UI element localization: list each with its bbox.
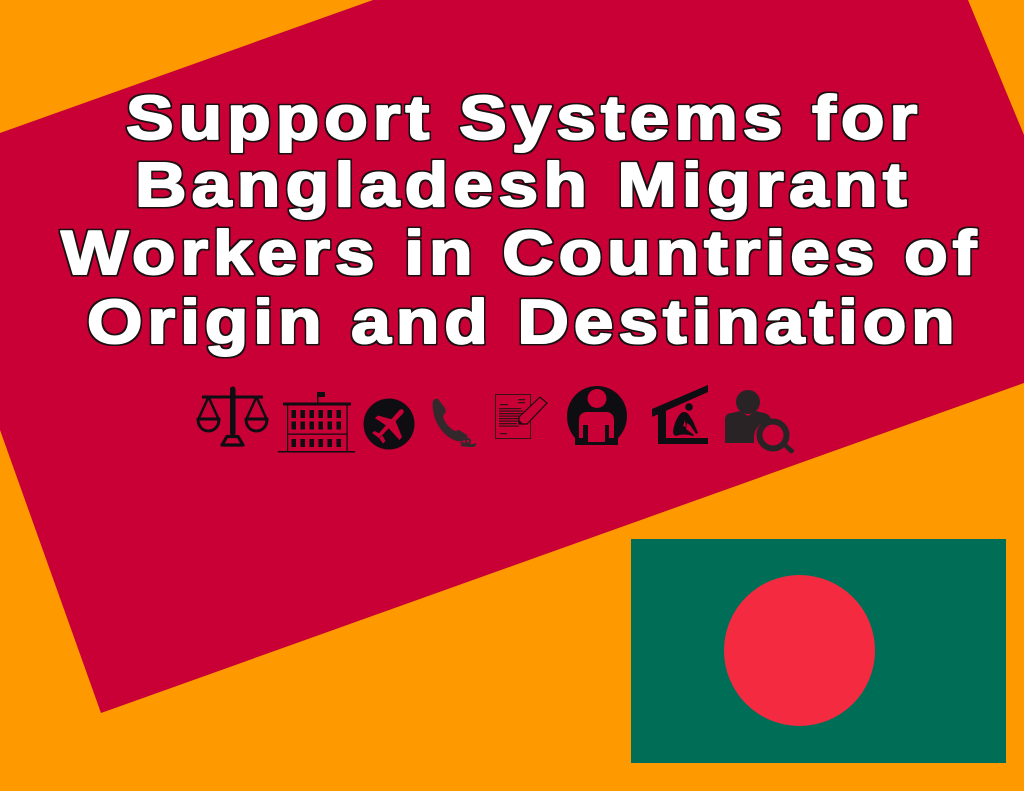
title: Origin and Destination (87, 288, 955, 357)
flag field (631, 539, 1006, 763)
icon: document with pencil (496, 394, 547, 438)
icon: person in circle (567, 386, 627, 445)
icon row (198, 385, 794, 453)
flag disc (724, 575, 875, 726)
title: Bangladesh Migrant (135, 151, 907, 220)
flag of Bangladesh (631, 539, 1006, 763)
title: Workers in Countries of (61, 219, 977, 288)
icon: person under shelter (652, 385, 708, 444)
icon: telephone (433, 399, 476, 446)
icon: airplane in circle (364, 398, 414, 450)
title: Support Systems for (126, 84, 917, 153)
title (61, 84, 977, 357)
icon: scales of justice (198, 386, 267, 445)
icon: office building (278, 392, 355, 452)
icon: person with magnifier (725, 390, 794, 453)
